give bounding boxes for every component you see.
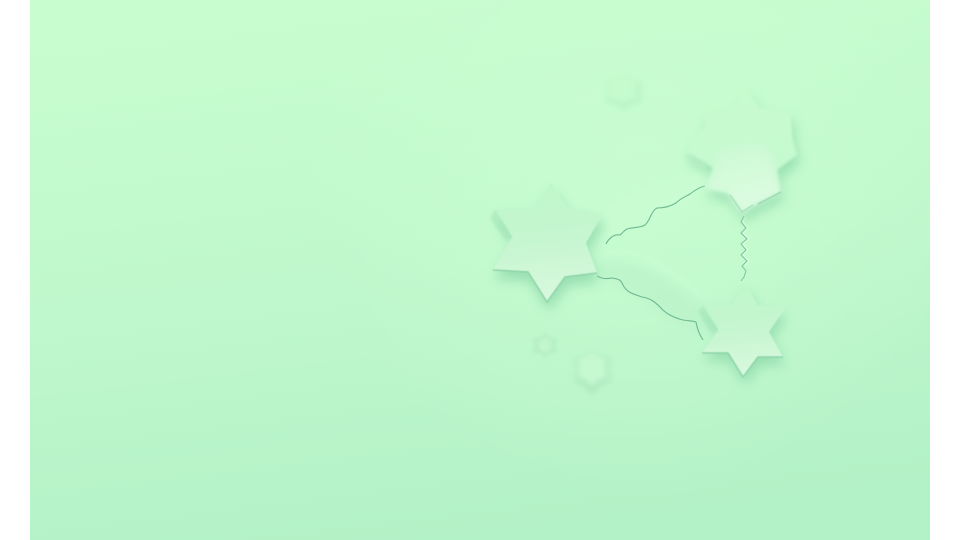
small star bottom: [575, 350, 611, 394]
star: upper right cluster front: [705, 142, 781, 213]
star: lower right: [698, 283, 787, 385]
lower edge: [702, 353, 783, 377]
small star face: [576, 350, 609, 388]
zigzag highlight: [743, 216, 749, 266]
small faint star top: [606, 71, 642, 111]
small star lower left: [533, 333, 557, 358]
vertical zigzag crack: [741, 216, 747, 281]
left point shade: [686, 152, 710, 172]
lower edge: [493, 270, 597, 302]
star: left large: [490, 182, 605, 311]
star: upper right cluster back: [685, 88, 800, 222]
left bevel: [490, 209, 512, 240]
upper ridge: [604, 170, 706, 244]
lower crack: [597, 276, 703, 340]
left bevel: [698, 305, 718, 332]
upper crack: [606, 186, 705, 244]
crack lines and ridges between stars: [597, 170, 749, 340]
right lower edge: [758, 192, 781, 204]
lower ridge highlight: [606, 251, 702, 296]
lower ridge: [598, 261, 705, 340]
small star face: [536, 335, 554, 355]
bottom tip edge: [730, 195, 753, 212]
